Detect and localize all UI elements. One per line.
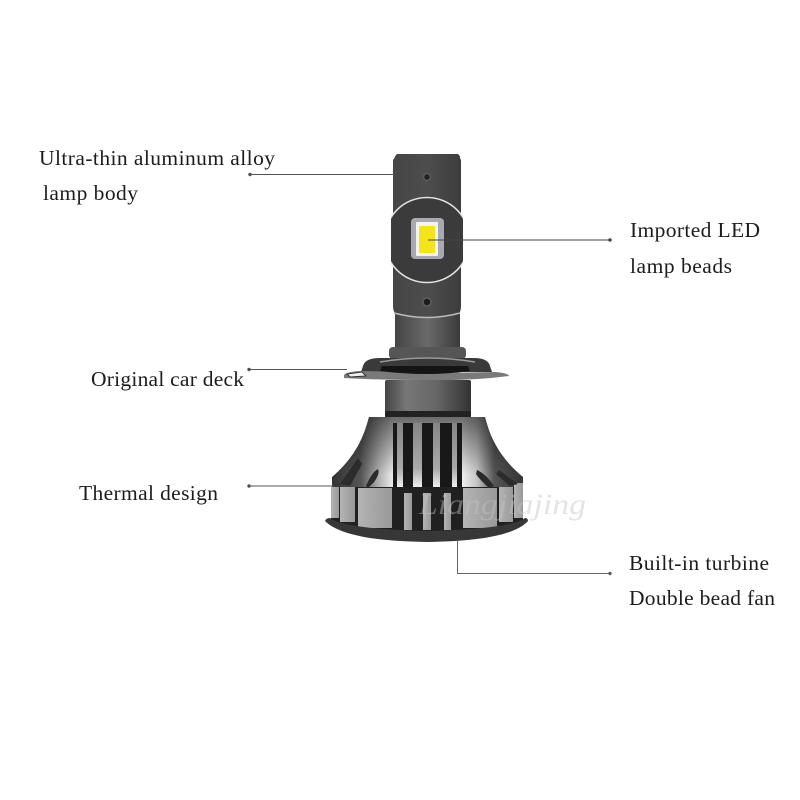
lower stem [389, 347, 466, 359]
neck [385, 380, 471, 417]
lower screw [423, 298, 431, 306]
label: ultra-thin aluminum alloy lamp body: Ultra-thin aluminum alloy [39, 146, 275, 170]
bulb head: aluminum alloy lamp body [391, 154, 463, 347]
label: ultra-thin aluminum alloy lamp body [39, 146, 275, 205]
leader line: LED beads [428, 239, 611, 241]
leader line: car deck [248, 368, 347, 371]
label: built-in turbine double bead fan: Double bead fan [629, 586, 775, 610]
watermark: Liangjiajing [418, 488, 586, 521]
label: ultra-thin aluminum alloy lamp body: lamp body [43, 181, 138, 205]
LED bulb product photo [325, 154, 528, 542]
cooling fins [393, 423, 462, 530]
label: original car deck: Original car deck [91, 367, 244, 391]
label: imported LED lamp beads: lamp beads [630, 254, 732, 278]
lower skirt panels [331, 487, 523, 532]
LED bead housing [411, 218, 444, 259]
round LED plate [391, 196, 463, 284]
label: imported LED lamp beads [630, 218, 760, 278]
leader line: turbine fan [458, 541, 611, 575]
label: built-in turbine double bead fan: Built-in turbine [629, 551, 769, 575]
leader line: thermal design [248, 485, 334, 487]
original car deck flange [344, 358, 509, 380]
yellow LED chip [419, 226, 435, 253]
label: imported LED lamp beads: Imported LED [630, 218, 760, 242]
built-in turbine fan base [325, 518, 528, 542]
side vents [366, 469, 378, 488]
label: built-in turbine double bead fan [629, 551, 775, 610]
label: thermal design: Thermal design [79, 481, 218, 505]
leader line: lamp body [249, 173, 394, 176]
thermal design heat sink [331, 417, 523, 532]
upper screw [424, 174, 430, 180]
